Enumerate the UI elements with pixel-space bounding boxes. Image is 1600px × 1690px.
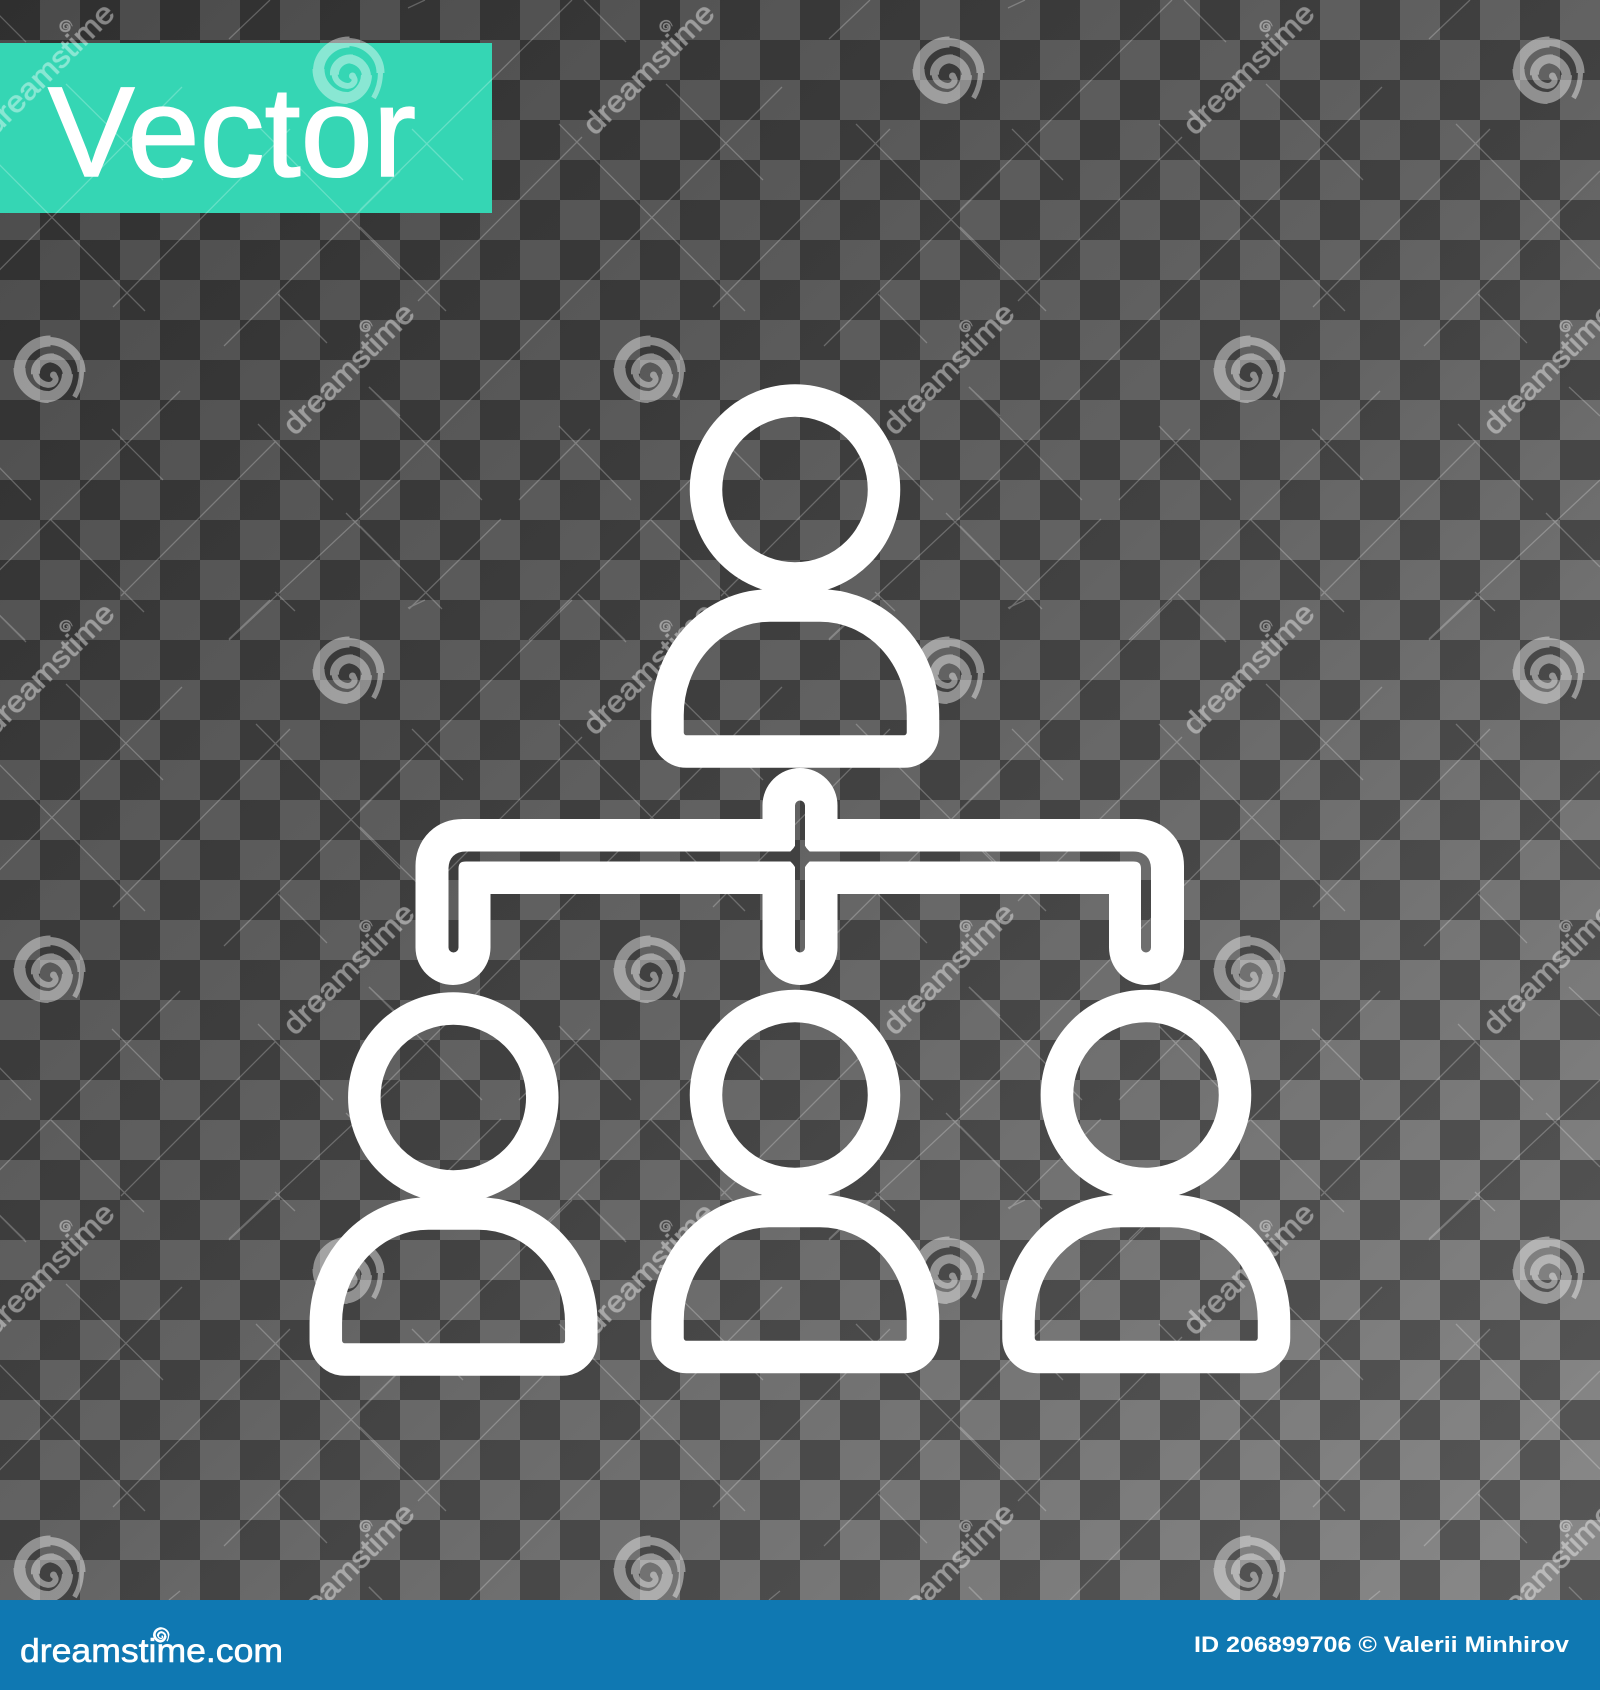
watermark text: dreamstime [1176,1196,1321,1341]
footer bar [0,1600,1600,1690]
watermark text: dreamstime [576,1196,721,1341]
footer credit: ID 206899706 © Valerii Minhirov [1194,1632,1570,1657]
watermark text: dreamstime [876,896,1021,1041]
icon: right person [1018,1006,1274,1357]
icon: connector tree [416,768,1184,985]
watermark text: dreamstime [876,1496,1021,1641]
watermark text: dreamstime [576,596,721,741]
watermark text: dreamstime [576,0,721,141]
banner: Vector: Vector [48,61,416,204]
icon: top person [668,400,923,752]
icon: left person [326,1008,581,1360]
watermark text: dreamstime [276,296,421,441]
icon: organisation chart [326,400,1274,1360]
watermark text: dreamstime [276,1496,421,1641]
watermark text: dreamstime [276,896,421,1041]
watermark text: dreamstime [1176,596,1321,741]
banner: Vector [0,43,492,213]
footer logo: dreamstime.com: dreamstime.com [20,1632,283,1669]
watermark text: dreamstime [1176,0,1321,141]
watermark text: dreamstime [876,296,1021,441]
icon: middle person [668,1006,923,1357]
